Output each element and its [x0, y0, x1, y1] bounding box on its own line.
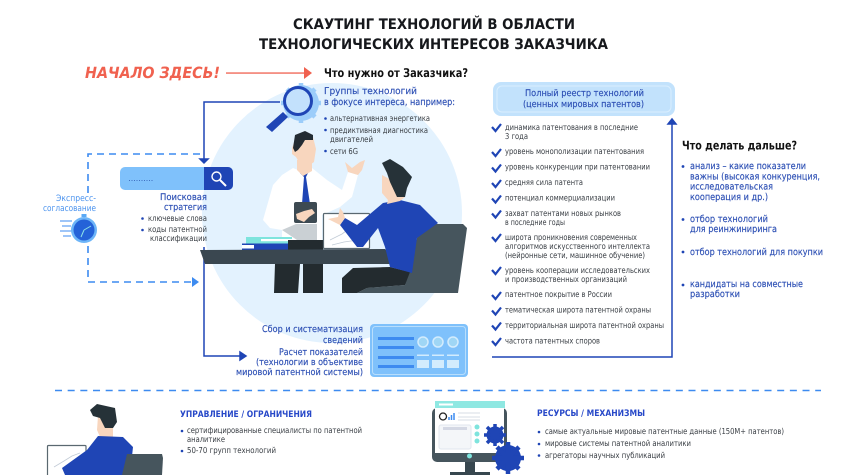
illustration: meeting at table [200, 131, 467, 293]
text: search strategy [141, 192, 207, 243]
list: next steps: для реинжиниринга [690, 224, 777, 235]
text: technology groups: в фокусе интереса, например: [324, 97, 455, 108]
text: search strategy: стратегия [164, 202, 207, 213]
panel: full registry [493, 82, 675, 116]
text: collection and calculation: мировой патентной системы) [236, 367, 363, 378]
text: management and constraints [180, 410, 362, 455]
check marks [492, 124, 501, 345]
checklist: indicators: динамика патентования в последние [505, 122, 638, 132]
text: express approval: Экспресс- [56, 194, 96, 204]
text: resources and mechanisms: самые актуальные мировые патентные данные (150М+ патентов) [545, 426, 784, 436]
list: next steps: отбор технологий для покупки [690, 247, 823, 258]
title: СКАУТИНГ ТЕХНОЛОГИЙ В ОБЛАСТИ [293, 15, 575, 33]
list: next steps: анализ – какие показатели [690, 161, 806, 172]
checklist: indicators: потенциал коммерциализации [505, 192, 615, 202]
table top [200, 249, 393, 264]
checklist: indicators: тематическая широта патентной охраны [505, 304, 651, 314]
text: technology groups: предиктивная диагностика [330, 125, 428, 135]
text: management and constraints: сертифицированные специалисты по патентной [187, 425, 362, 435]
text: technology groups: Группы технологий [324, 86, 417, 97]
list: next steps: отбор технологий [690, 214, 768, 225]
icon: stopwatch [60, 214, 97, 243]
arrow: strategy to collection [204, 247, 246, 360]
checklist: indicators: алгоритмов искусственного интеллекта [505, 241, 650, 251]
arrow: start to question [226, 67, 312, 79]
background circle [202, 83, 462, 343]
icon: magnifier with gear [266, 83, 321, 132]
text: management and constraints: 50-70 групп технологий [187, 445, 276, 455]
text: express approval: согласование [43, 204, 96, 214]
text: technology groups: сети 6G [330, 146, 358, 156]
text: management and constraints: аналитике [187, 434, 225, 444]
text: collection and calculation: (технологии в объективе [256, 357, 363, 368]
panel: full registry: (ценных мировых патентов) [523, 99, 644, 110]
list: next steps [682, 161, 823, 300]
text: search strategy: классификации [150, 233, 207, 243]
text: technology groups [324, 86, 455, 156]
text: management and constraints: УПРАВЛЕНИЕ / ОГРАНИЧЕНИЯ [180, 410, 312, 420]
text: resources and mechanisms: РЕСУРСЫ / МЕХАНИЗМЫ [537, 409, 645, 419]
heading: customer needs: Что нужно от Заказчика? [324, 66, 468, 80]
heading: next steps: Что делать дальше? [682, 138, 797, 152]
checklist: indicators: в последние годы [505, 217, 565, 227]
list: next steps: важны (высокая конкуренция, [690, 172, 820, 182]
checklist: indicators: уровень конкуренции при патентовании [505, 162, 650, 172]
text: resources and mechanisms: агрегаторы научных публикаций [545, 450, 665, 460]
gears [484, 424, 524, 474]
text: resources and mechanisms: мировые системы патентной аналитики [545, 438, 691, 448]
text: collection and calculation: Расчет показателей [279, 347, 363, 358]
checklist: indicators: широта проникновения современных [505, 232, 637, 242]
list: next steps: кандидаты на совместные [690, 279, 803, 290]
checklist: indicators: захват патентами новых рынков [505, 208, 621, 218]
dashed feedback arrow [88, 154, 200, 287]
checklist: indicators: территориальная широта патентной охраны [505, 320, 664, 330]
text: resources and mechanisms [537, 409, 784, 460]
sitting man [328, 159, 438, 293]
checklist: indicators: патентное покрытие в России [505, 289, 612, 299]
checklist: indicators: 3 года [505, 131, 528, 141]
text: search strategy: ключевые слова [148, 213, 207, 223]
standing man [263, 131, 365, 293]
text: search strategy: коды патентной [148, 224, 207, 234]
start label: НАЧАЛО ЗДЕСЬ! [85, 64, 220, 82]
checklist: indicators: средняя сила патента [505, 177, 583, 187]
panel: data dashboard [370, 324, 468, 377]
panel: full registry: Полный реестр технологий [525, 88, 644, 99]
text: collection and calculation: сведений [323, 335, 363, 346]
title: ТЕХНОЛОГИЧЕСКИХ ИНТЕРЕСОВ ЗАКАЗЧИКА [259, 37, 609, 53]
chair [357, 224, 467, 293]
list: next steps: кооперация и др.) [690, 192, 768, 203]
icon: monitor with gears [432, 401, 524, 475]
text: search strategy: Поисковая [160, 192, 207, 203]
checklist: indicators [492, 122, 664, 346]
checklist: indicators: и производственных организаций [505, 274, 627, 284]
arrow: checklist to registry [492, 119, 676, 357]
laptop [324, 214, 370, 248]
text: express approval [43, 194, 96, 214]
title [259, 15, 609, 53]
checklist: indicators: (нейронные сети, машинное обучение) [505, 250, 645, 260]
text: technology groups: альтернативная энергетика [330, 113, 430, 123]
checklist: indicators: уровень кооперации исследовательских [505, 265, 650, 275]
search box [120, 167, 233, 190]
text: collection and calculation [236, 324, 363, 378]
arrow: groups to search [200, 102, 280, 163]
checklist: indicators: уровень монополизации патентования [505, 146, 644, 156]
list: next steps: разработки [690, 289, 740, 300]
text: technology groups: двигателей [330, 134, 373, 144]
books [242, 237, 323, 250]
text: collection and calculation: Сбор и систематизация [262, 324, 363, 335]
illustration: man at laptop [48, 404, 163, 475]
checklist: indicators: частота патентных споров [505, 336, 600, 346]
list: next steps: исследовательская [690, 182, 773, 192]
